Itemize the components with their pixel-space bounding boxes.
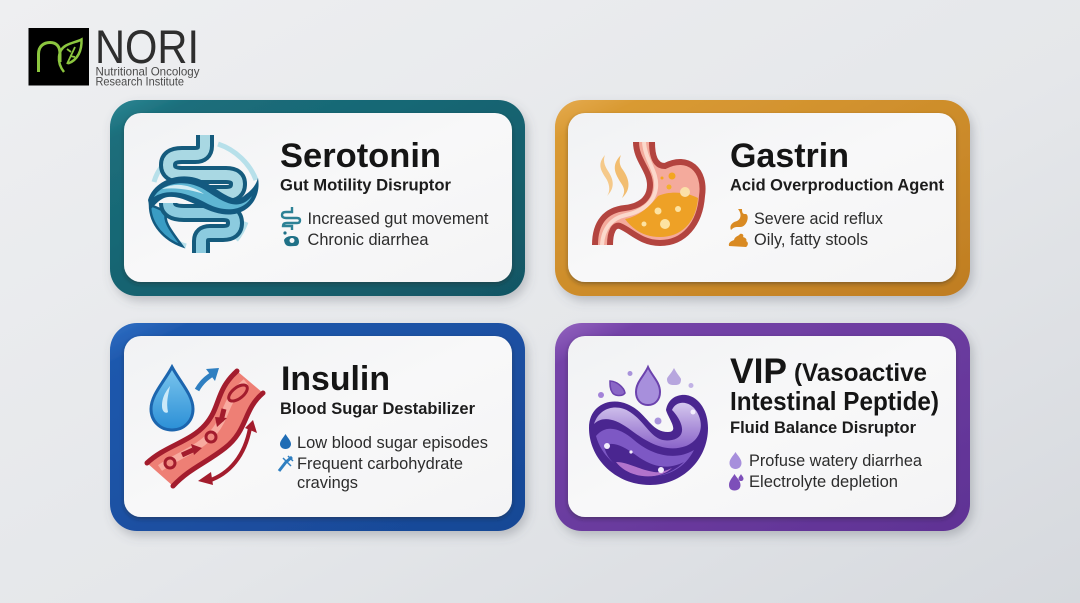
subheading: Fluid Balance Disruptor — [730, 419, 917, 437]
item: increased gut movement: Increased gut movement — [308, 210, 489, 228]
item: chronic diarrhea: Chronic diarrhea — [308, 231, 429, 249]
item: frequent carbohydrate cravings — [279, 455, 463, 492]
logo wordmark: NORI — [95, 20, 199, 73]
item: low blood sugar episodes: Low blood sugar episodes — [297, 434, 488, 452]
item: frequent carbohydrate cravings: Frequent carbohydrate — [297, 455, 463, 473]
item: frequent carbohydrate cravings: cravings — [297, 474, 358, 492]
heading: Serotonin — [280, 137, 441, 175]
panel: Gastrin — [555, 100, 970, 296]
card frame — [110, 100, 525, 296]
heading: Insulin — [281, 360, 390, 398]
heading — [730, 352, 939, 416]
icon: stomach — [595, 142, 703, 245]
icon: leaf logo mark — [28, 28, 89, 86]
heading: VIP — [730, 352, 787, 391]
heading: Gastrin — [730, 137, 849, 175]
logo tagline: Research Institute — [96, 74, 184, 88]
item: oily, fatty stools: Oily, fatty stools — [754, 231, 868, 249]
icon: fluid wave and drops — [589, 367, 708, 485]
subheading: Blood Sugar Destabilizer — [280, 400, 476, 418]
heading: Intestinal Peptide) — [730, 386, 939, 416]
item: increased gut movement — [282, 207, 489, 230]
icon: blood drop and vessel — [147, 367, 263, 486]
icon: intestine — [148, 135, 259, 253]
card frame — [555, 323, 970, 531]
subheading: Acid Overproduction Agent — [730, 176, 944, 194]
item: electrolyte depletion: Electrolyte depletion — [749, 473, 898, 491]
logo tagline: Nutritional Oncology — [96, 64, 200, 78]
logo tagline — [96, 64, 200, 88]
subheading: Gut Motility Disruptor — [280, 176, 452, 194]
item: severe acid reflux: Severe acid reflux — [754, 210, 884, 228]
panel: VIP — [555, 323, 970, 531]
heading: (Vasoactive — [794, 359, 927, 387]
panel: Insulin — [110, 323, 525, 531]
panel: Serotonin — [110, 100, 525, 296]
card frame — [555, 100, 970, 296]
card frame — [110, 323, 525, 531]
item: profuse watery diarrhea: Profuse watery diarrhea — [749, 452, 923, 470]
logo: NORI — [28, 20, 200, 88]
